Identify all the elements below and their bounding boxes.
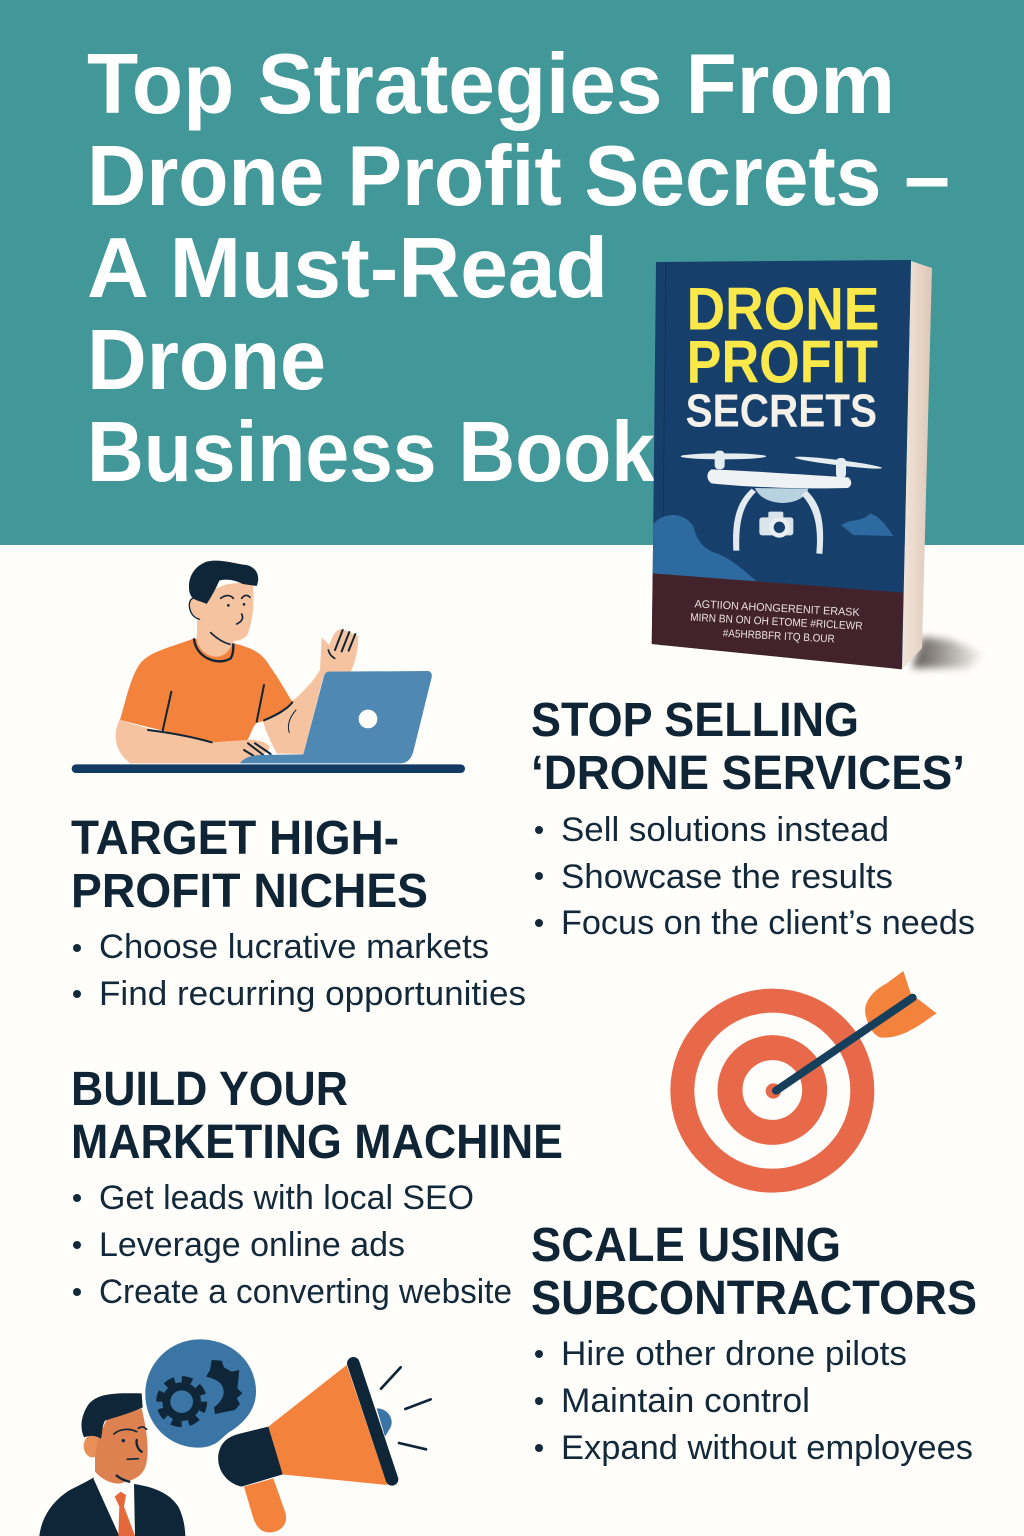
- arrow shaft: [776, 998, 913, 1091]
- bullet list: Choose lucrative markets: [99, 928, 489, 966]
- collar: [194, 638, 233, 661]
- bullet list: Get leads with local SEO: [99, 1179, 474, 1217]
- book title text: DRONE: [687, 275, 879, 342]
- raised arm: [263, 629, 358, 754]
- clouds: [653, 515, 757, 582]
- bullet list: Sell solutions instead: [561, 811, 889, 849]
- heading: BUILD YOUR: [71, 1063, 348, 1116]
- face: [199, 583, 254, 641]
- book front cover: [652, 260, 911, 669]
- title: Business Book: [87, 405, 656, 500]
- heading: [71, 812, 428, 918]
- heading: [71, 1063, 563, 1169]
- megaphone handle: [244, 1478, 286, 1532]
- book title text: SECRETS: [686, 385, 877, 437]
- bullet list: [73, 1179, 512, 1311]
- shirt: [120, 638, 292, 742]
- heading: MARKETING MACHINE: [71, 1116, 563, 1169]
- section: build your marketing machine: [71, 1063, 563, 1311]
- spine crease: [662, 262, 666, 645]
- heading: ‘DRONE SERVICES’: [531, 747, 965, 800]
- heading: SUBCONTRACTORS: [531, 1272, 977, 1325]
- neck: [197, 617, 235, 657]
- bullet list: Find recurring opportunities: [99, 975, 526, 1013]
- book shadow: [912, 637, 986, 668]
- bullet list: [73, 928, 526, 1013]
- book small print: [690, 598, 863, 646]
- table bar: [72, 764, 465, 773]
- book small print: #A5HRBBFR ITQ B.OUR: [723, 628, 835, 646]
- book small print: MIRN BN ON OH ETOME #RICLEWR: [690, 612, 863, 633]
- bullet list: Maintain control: [561, 1382, 810, 1420]
- tie: [115, 1492, 135, 1536]
- bullet list: Create a converting website: [99, 1273, 512, 1311]
- section: stop selling drone services: [531, 694, 975, 942]
- megaphone horn: [268, 1365, 387, 1485]
- teal header band: [0, 0, 1024, 545]
- title: Top Strategies From: [87, 37, 895, 132]
- heading: [531, 694, 965, 800]
- bullseye: [766, 1083, 781, 1099]
- heading: [531, 1219, 977, 1325]
- illustration: businessman with gears and megaphone: [39, 1339, 431, 1536]
- forearm on table: [116, 720, 269, 763]
- book title text: [686, 275, 879, 437]
- bullet list: Leverage online ads: [99, 1226, 405, 1264]
- ear: [189, 598, 208, 619]
- bullet list: Expand without employees: [561, 1429, 973, 1467]
- hair: [81, 1393, 143, 1439]
- bullet list: Focus on the client’s needs: [561, 904, 975, 942]
- shirt collar: [93, 1473, 135, 1536]
- heading: TARGET HIGH-: [71, 812, 399, 865]
- megaphone mouth: [218, 1427, 283, 1487]
- section: target high-profit niches: [71, 812, 526, 1013]
- suit: [39, 1478, 185, 1536]
- bullet list: Hire other drone pilots: [561, 1335, 907, 1373]
- heading: SCALE USING: [531, 1219, 841, 1272]
- title: Drone: [87, 313, 326, 408]
- clothing and hand lines: [148, 630, 355, 756]
- heading: PROFIT NICHES: [71, 865, 428, 918]
- sound lines: [381, 1367, 431, 1449]
- illustration: man at laptop: [72, 561, 465, 773]
- bullet list: Showcase the results: [561, 858, 893, 896]
- hair: [189, 561, 258, 604]
- target rings: [682, 1001, 862, 1181]
- arrow fletching: [865, 971, 937, 1038]
- megaphone bell back: [377, 1408, 392, 1437]
- section: scale using subcontractors: [531, 1219, 977, 1467]
- bullet list: [535, 1335, 973, 1467]
- title: A Must-Read: [87, 221, 608, 316]
- heading: STOP SELLING: [531, 694, 859, 747]
- bullet list: [535, 811, 975, 942]
- gears bubble: [145, 1339, 256, 1448]
- ear: [84, 1435, 101, 1457]
- book cover illustration: [652, 260, 986, 669]
- face: [95, 1408, 148, 1484]
- book small print: AGTIION AHONGERENIT ERASK: [694, 598, 861, 619]
- facial details: [211, 595, 250, 644]
- brown band: [652, 573, 903, 669]
- megaphone rim: [353, 1363, 392, 1479]
- book title text: PROFIT: [687, 329, 878, 396]
- gear icon left: [159, 1379, 204, 1424]
- drone: [681, 451, 882, 554]
- laptop: [240, 671, 432, 763]
- book pages: [902, 261, 932, 669]
- title: Drone Profit Secrets –: [87, 129, 950, 224]
- icon: target with arrow: [682, 971, 937, 1181]
- gear icon right: [206, 1360, 242, 1414]
- facial details: [114, 1427, 147, 1482]
- title: [87, 37, 950, 500]
